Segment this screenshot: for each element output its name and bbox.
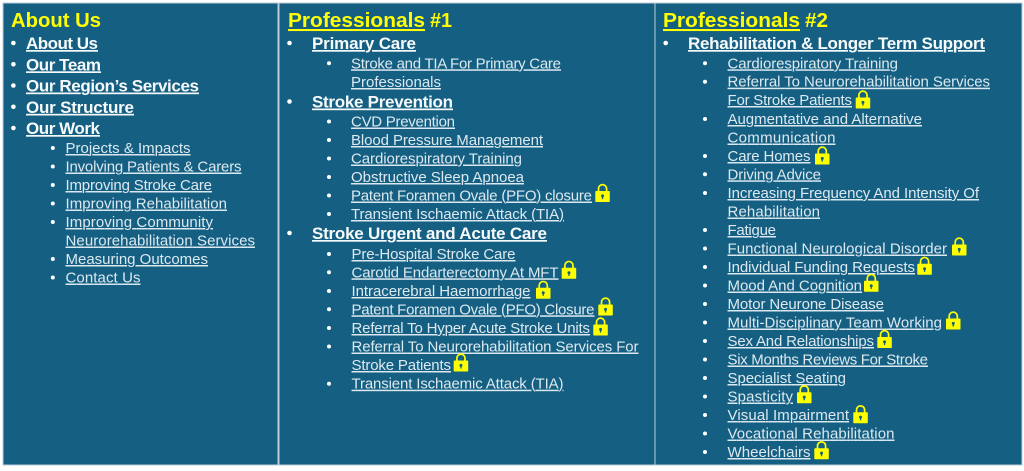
sub-link: Functional Neurological Disorder: Functional Neurological Disorder (728, 240, 947, 258)
sub-link: Measuring Outcomes: Measuring Outcomes (66, 251, 208, 268)
sub-link: Cardiorespiratory Training: Cardiorespiratory Training (351, 150, 522, 168)
icon: lock (853, 406, 868, 423)
sub-link: Improving Community Neurorehabilitation Services: Improving Community (66, 214, 214, 231)
sub-link: Patent Foramen Ovale (PFO) closure: Patent Foramen Ovale (PFO) closure (351, 188, 592, 204)
icon: lock (877, 331, 892, 348)
sub-link: Augmentative and Alternative Communication: Communication (728, 130, 836, 146)
sub-link: Cardiorespiratory Training: Cardiorespiratory Training (728, 55, 898, 72)
panel: professionals 1 (279, 3, 655, 465)
sub-link: Visual Impairment: Visual Impairment (728, 407, 850, 424)
sub-link: Involving Patients & Carers: Involving Patients & Carers (66, 158, 242, 176)
sub-link: Stroke and TIA For Primary Care Professionals: Professionals (351, 74, 441, 91)
sub-link: Referral To Neurorehabilitation Services For Stroke Patients: Referral To Neurorehabilitation Services (728, 74, 990, 91)
sub-link: Intracerebral Haemorrhage: Intracerebral Haemorrhage (352, 283, 530, 300)
icon: lock (917, 257, 932, 275)
heading: Professionals #1: #1 (430, 9, 452, 32)
sub-link: Stroke and TIA For Primary Care Professionals: Stroke and TIA For Primary Care (351, 55, 561, 72)
icon: lock (562, 261, 576, 279)
sub-link: Wheelchairs: Wheelchairs (728, 444, 810, 461)
heading: Professionals #1: Professionals (288, 9, 425, 32)
panel: professionals 2 (655, 3, 1022, 465)
sub-link: Vocational Rehabilitation: Vocational Rehabilitation (728, 426, 894, 442)
sub-link: Spasticity: Spasticity (728, 388, 794, 406)
sub-link: Obstructive Sleep Apnoea: Obstructive Sleep Apnoea (351, 169, 525, 186)
icon: lock (814, 442, 829, 459)
sub-link: Increasing Frequency And Intensity Of Rehabilitation: Increasing Frequency And Intensity Of (728, 185, 980, 202)
link: Our Region's Services: Our Region’s Services (26, 76, 199, 96)
icon: lock (864, 274, 878, 292)
sub-link: Increasing Frequency And Intensity Of Rehabilitation: Rehabilitation (728, 204, 820, 220)
panel: about us (3, 3, 278, 465)
sub-link: Stroke and TIA For Primary Care Professionals (327, 55, 561, 91)
sub-link: Transient Ischaemic Attack (TIA): Transient Ischaemic Attack (TIA) (352, 376, 564, 393)
icon: lock (797, 386, 812, 403)
sub-link: Augmentative and Alternative Communication: Augmentative and Alternative (728, 111, 922, 128)
sub-link: Improving Rehabilitation: Improving Rehabilitation (66, 196, 227, 212)
link: About Us: About Us (26, 34, 98, 53)
section link: Stroke Prevention: Stroke Prevention (312, 92, 453, 112)
sub-link: CVD Prevention: CVD Prevention (351, 114, 455, 130)
sub-link: Blood Pressure Management: Blood Pressure Management (351, 132, 544, 149)
heading: About Us: About Us (11, 9, 101, 32)
sub-link: Six Months Reviews For Stroke: Six Months Reviews For Stroke (728, 352, 928, 368)
sub-link: Referral To Neurorehabilitation Services For Stroke Patients: Stroke Patients (352, 357, 451, 374)
section link: Rehabilitation & Longer Term Support: Rehabilitation & Longer Term Support (688, 34, 985, 53)
link: Our Work: Our Work (26, 119, 101, 138)
icon: lock (815, 147, 830, 164)
sub-link: Care Homes: Care Homes (728, 148, 810, 165)
icon: lock (952, 238, 966, 256)
icon: lock (598, 298, 613, 316)
sub-link: Individual Funding Requests: Individual Funding Requests (728, 259, 915, 276)
icon: lock (593, 318, 608, 336)
section link: Primary Care: Primary Care (312, 34, 416, 53)
icon: lock (454, 354, 468, 372)
icon: lock (536, 281, 550, 299)
sub-link: Pre-Hospital Stroke Care: Pre-Hospital Stroke Care (352, 246, 516, 263)
sub-link: Improving Community Neurorehabilitation Services: Neurorehabilitation Services (66, 232, 255, 250)
sub-link: Improving Stroke Care: Improving Stroke Care (66, 177, 212, 194)
sub-link: Referral To Neurorehabilitation Services For Stroke Patients (327, 338, 638, 374)
link: Our Team: Our Team (26, 55, 101, 74)
sub-link: Increasing Frequency And Intensity Of Rehabilitation (703, 185, 980, 220)
sub-link: Improving Community Neurorehabilitation Services (51, 214, 255, 250)
sub-link: Sex And Relationships: Sex And Relationships (728, 333, 874, 350)
sub-link: Contact Us: Contact Us (66, 270, 140, 286)
sub-link: Referral To Neurorehabilitation Services For Stroke Patients: For Stroke Patients (728, 92, 852, 109)
icon: lock (856, 91, 870, 108)
section link: Stroke Urgent and Acute Care: Stroke Urgent and Acute Care (312, 224, 547, 243)
sub-link: Driving Advice: Driving Advice (728, 166, 821, 183)
sub-link: Transient Ischaemic Attack (TIA): Transient Ischaemic Attack (TIA) (351, 206, 564, 223)
sub-link: Specialist Seating: Specialist Seating (728, 370, 846, 387)
heading: Professionals #2: Professionals (663, 9, 800, 32)
link: Our Structure: Our Structure (26, 98, 134, 117)
sub-link: Mood And Cognition: Mood And Cognition (728, 278, 862, 294)
sub-link: Motor Neurone Disease: Motor Neurone Disease (728, 296, 884, 313)
sub-link: Referral To Neurorehabilitation Services For Stroke Patients (703, 74, 990, 109)
icon: lock (946, 312, 960, 330)
sub-link: Projects & Impacts: Projects & Impacts (66, 140, 190, 157)
sub-link: Referral To Neurorehabilitation Services For Stroke Patients: Referral To Neurorehabilitation Services For (352, 338, 638, 356)
sub-link: Fatigue (703, 222, 776, 239)
sub-link: Augmentative and Alternative Communication (703, 111, 922, 146)
icon: lock (595, 185, 610, 202)
sub-link: Multi-Disciplinary Team Working: Multi-Disciplinary Team Working (728, 314, 942, 332)
sub-link: Carotid Endarterectomy At MFT: Carotid Endarterectomy At MFT (352, 264, 558, 281)
sub-link: Fatigue: Fatigue (728, 222, 776, 239)
sub-link: Patent Foramen Ovale (PFO) Closure: Patent Foramen Ovale (PFO) Closure (352, 301, 594, 318)
sub-link: Referral To Hyper Acute Stroke Units: Referral To Hyper Acute Stroke Units (352, 320, 590, 337)
heading: Professionals #2: #2 (805, 9, 828, 32)
